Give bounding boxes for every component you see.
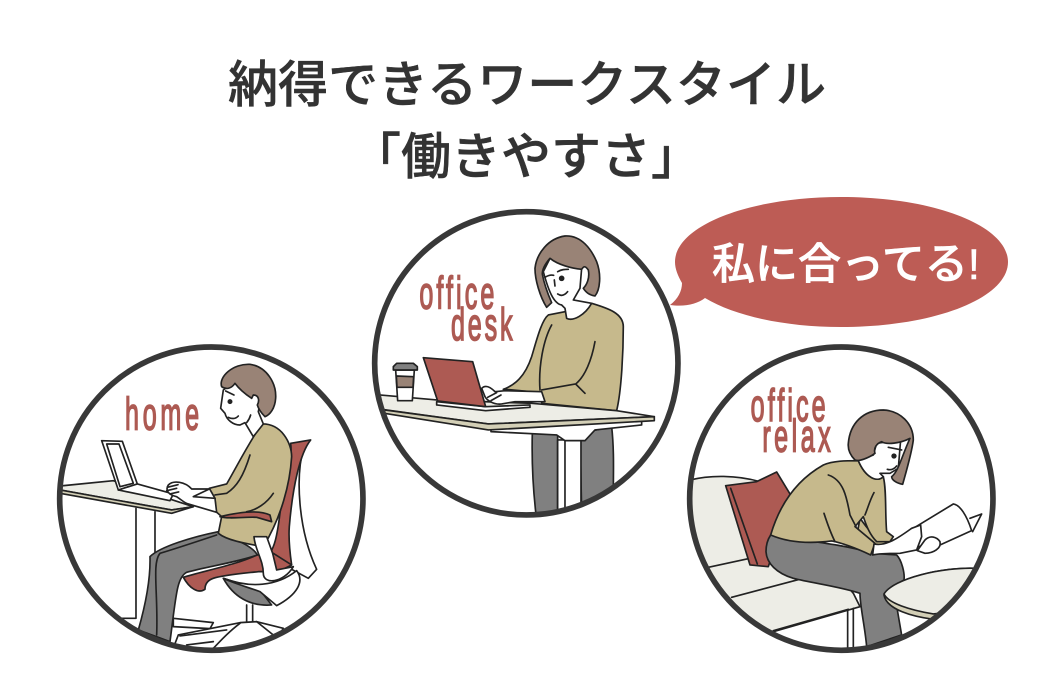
chair xyxy=(170,440,317,657)
chair support xyxy=(254,537,293,581)
face details xyxy=(226,391,251,423)
hair xyxy=(848,410,913,484)
coffee cup xyxy=(393,363,417,401)
sweater folds xyxy=(824,475,874,542)
sweater xyxy=(209,424,292,547)
desk top xyxy=(380,395,654,430)
label: office xyxy=(751,380,826,431)
desk underside xyxy=(491,420,642,441)
forearm and hand xyxy=(167,482,217,512)
face and neck xyxy=(858,440,901,479)
label xyxy=(751,380,831,462)
trousers xyxy=(532,427,613,520)
speech bubble xyxy=(670,197,1008,327)
scene: office desk xyxy=(375,212,678,520)
legs xyxy=(138,532,257,642)
scene: home xyxy=(60,347,363,657)
laptop xyxy=(102,441,173,501)
sweater folds xyxy=(540,325,595,393)
face details xyxy=(887,447,902,470)
label: home xyxy=(125,388,199,439)
speech bubble: 私に合ってる! xyxy=(712,241,980,289)
label: desk xyxy=(451,299,513,350)
label: relax xyxy=(762,411,831,462)
far arm xyxy=(858,520,895,544)
floor foot of desk xyxy=(173,618,213,629)
hand xyxy=(873,525,922,555)
fingers xyxy=(167,485,179,494)
desk stand xyxy=(558,440,581,517)
circle frame xyxy=(60,347,363,650)
sweater xyxy=(503,303,623,411)
neck and face xyxy=(543,258,592,319)
sweater xyxy=(771,461,893,555)
sweater folds xyxy=(215,455,273,512)
trousers xyxy=(766,535,904,647)
hands xyxy=(482,386,545,404)
title: 「働きやすさ」 xyxy=(351,129,701,185)
title xyxy=(228,57,826,185)
sofa xyxy=(687,476,860,653)
title: 納得できるワークスタイル xyxy=(228,57,826,113)
hair xyxy=(535,236,600,307)
hair xyxy=(221,364,276,417)
armrest xyxy=(220,512,272,522)
fingers xyxy=(488,393,501,401)
desk leg xyxy=(117,508,155,618)
label: office xyxy=(419,267,494,318)
cushion xyxy=(726,472,792,567)
scene: office relax xyxy=(687,347,1000,653)
laptop xyxy=(423,358,530,411)
other hand xyxy=(917,537,940,553)
desk top xyxy=(60,481,193,513)
label xyxy=(419,267,513,350)
neck and face xyxy=(220,388,264,437)
circle frame xyxy=(690,347,993,650)
circle frame xyxy=(375,212,678,515)
side table xyxy=(884,568,1000,620)
book xyxy=(913,504,982,550)
face details xyxy=(545,269,568,295)
